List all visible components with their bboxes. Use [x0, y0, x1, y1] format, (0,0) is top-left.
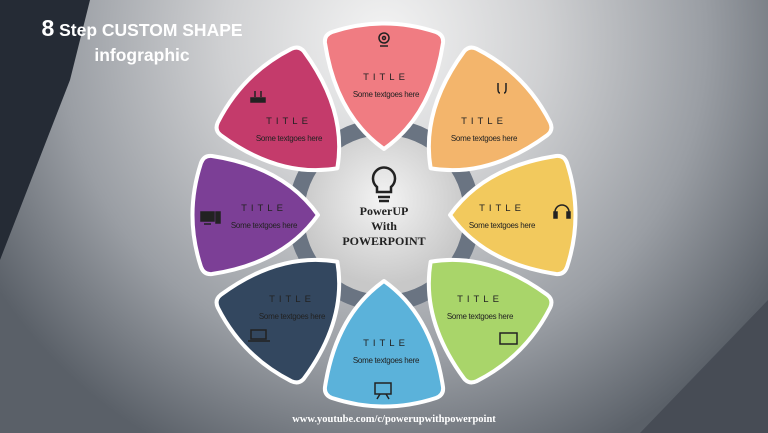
center text: PowerUP: [360, 204, 408, 218]
text: bottom-right: TITLE: [457, 294, 503, 305]
petal: bottom-right: [389, 220, 561, 392]
text: bottom-left: TITLE: [269, 294, 315, 305]
text: top-left: Some textgoes here: [256, 134, 322, 142]
text: bottom: [353, 338, 420, 364]
text: right: TITLE: [479, 203, 525, 214]
text: top-right: [451, 116, 518, 142]
icon: monitor: [500, 333, 517, 344]
petal: bottom-left: [207, 220, 379, 392]
text: top: [353, 72, 420, 98]
text: left: [231, 203, 298, 230]
icon: earphones: [498, 83, 506, 93]
text: top-right: TITLE: [461, 116, 507, 127]
title: infographic: [94, 45, 190, 65]
petal: top-right: [389, 38, 561, 210]
text: bottom-right: Some textgoes here: [447, 312, 513, 320]
icon: desktop: [201, 212, 220, 224]
icon: headphones: [554, 205, 570, 218]
text: top: TITLE: [363, 72, 409, 83]
icons: [201, 33, 570, 399]
icon: webcam: [379, 33, 389, 46]
petal: right: [450, 156, 576, 274]
text: top-right: Some textgoes here: [451, 134, 517, 142]
text: top-left: [256, 116, 322, 142]
text: bottom: Some textgoes here: [353, 356, 419, 364]
center text: With: [371, 219, 397, 233]
petal: top-left: [207, 38, 379, 210]
text: bottom-left: [259, 294, 326, 320]
text: left: TITLE: [241, 203, 287, 214]
center text: [342, 204, 426, 248]
text: bottom-right: [447, 294, 514, 320]
text: top-left: TITLE: [266, 116, 312, 127]
text: bottom-left: Some textgoes here: [259, 312, 325, 320]
icon: router: [251, 91, 265, 102]
petal: left: [192, 156, 318, 274]
text: left: Some textgoes here: [231, 220, 297, 230]
icon: presentation: [375, 383, 391, 399]
text: right: [469, 203, 536, 230]
petal: bottom: [325, 281, 443, 406]
text: right: Some textgoes here: [469, 220, 535, 230]
center text: POWERPOINT: [342, 234, 426, 248]
icon: laptop: [248, 330, 270, 341]
icon: lightbulb: [373, 168, 395, 201]
title: [41, 15, 243, 65]
petal: top: [325, 24, 443, 149]
text: top: Some textgoes here: [353, 90, 419, 98]
title: 8 Step CUSTOM SHAPE: [41, 15, 243, 41]
text: bottom: TITLE: [363, 338, 409, 349]
footer url: www.youtube.com/c/powerupwithpowerpoint: [292, 414, 496, 425]
